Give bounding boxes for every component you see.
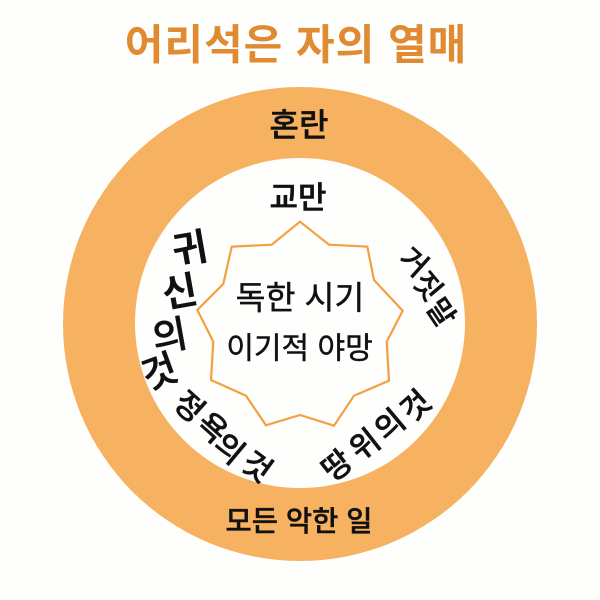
curved label: 거짓말: 말: [419, 293, 461, 333]
label: 혼란: 혼란: [270, 107, 328, 143]
center text: 독한 시기: [236, 280, 364, 316]
curved label: 거짓말: [392, 242, 461, 333]
curved label: 땅 위의 것: [315, 383, 438, 489]
curved label: 땅 위의 것: 땅: [315, 443, 359, 489]
curved label: 땅 위의 것: 위: [343, 422, 387, 468]
curved label: 정욕의 것: 의: [207, 426, 251, 472]
curved label: 정욕의 것: [167, 384, 279, 490]
curved label: 거짓말: 거: [392, 242, 434, 284]
curved label: 귀신의 것: 의: [149, 313, 191, 361]
curved label: 귀신의 것: [136, 226, 211, 399]
star polygon: [197, 222, 403, 426]
label: 교만: 교만: [269, 180, 327, 216]
label: 모든 악한 일: 모든 악한 일: [226, 506, 372, 538]
inner circle: [135, 158, 465, 488]
curved label: 거짓말: 짓: [406, 266, 448, 308]
outer ring: 혼란, 모든 악한 일: [63, 87, 537, 561]
curved label: 귀신의 것: 신: [159, 269, 201, 317]
curved label: 정욕의 것: 것: [235, 444, 279, 490]
curved label: 땅 위의 것: 것: [394, 383, 438, 429]
curved label: 땅 위의 것: 의: [368, 402, 412, 448]
curved label: 정욕의 것: 욕: [190, 405, 234, 451]
curved label: 귀신의 것: 귀: [169, 226, 211, 274]
center text: 이기적 야망: [226, 332, 373, 366]
center text: [226, 280, 373, 366]
curved label: 귀신의 것: 것: [136, 347, 184, 399]
title: 어리석은 자의 열매: [125, 22, 467, 68]
curved label: 정욕의 것: 정: [167, 384, 211, 430]
